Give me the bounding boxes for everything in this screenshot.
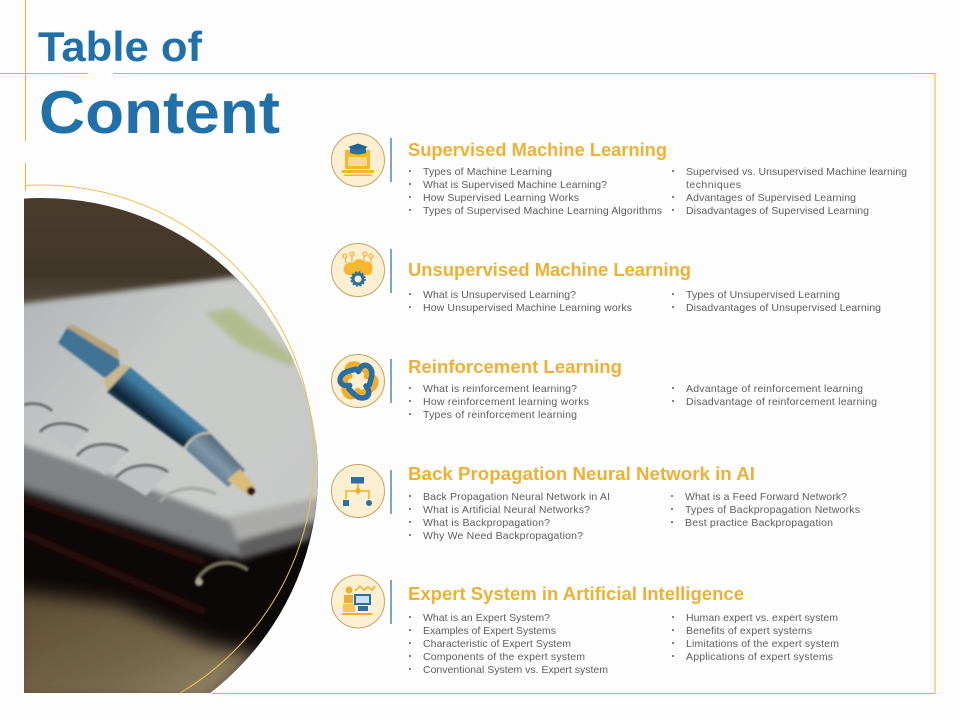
icon: flow hierarchy xyxy=(332,464,384,518)
notebook rings xyxy=(24,404,248,586)
bullet list: right: Advantage of reinforcement learning xyxy=(686,383,863,395)
bullet list: left: What is Supervised Machine Learning? xyxy=(423,179,607,191)
bullet list: right: Best practice Backpropagation xyxy=(685,517,833,529)
bullet list: left xyxy=(409,289,632,314)
bullet list: left: How Supervised Learning Works xyxy=(423,192,579,204)
bullet list: right: Types of Backpropagation Networks xyxy=(685,504,860,516)
bullet list: right: Types of Unsupervised Learning xyxy=(686,289,840,301)
bullet list: left xyxy=(409,491,610,542)
bullet list: right: Limitations of the expert system xyxy=(686,638,839,650)
icon: interlocked loops xyxy=(332,354,384,408)
bullet list: right: Benefits of expert systems xyxy=(686,625,812,637)
section: Reinforcement Learning xyxy=(332,354,877,421)
icon: brain with gear xyxy=(332,244,384,296)
section: Supervised Machine Learning: Supervised Machine Learning xyxy=(408,140,667,160)
bullet list: right xyxy=(672,289,881,314)
bullet list: right: Disadvantages of Supervised Learning xyxy=(686,205,869,217)
bullet list: left: Why We Need Backpropagation? xyxy=(423,530,583,542)
icon: laptop with graduation cap xyxy=(332,134,384,186)
bullet list: left: How reinforcement learning works xyxy=(423,396,589,408)
title: Content xyxy=(39,79,280,146)
thin gold arc around photo xyxy=(26,185,314,693)
bullet list: left: Examples of Expert Systems xyxy=(423,625,556,637)
bullet list: left: What is an Expert System? xyxy=(423,612,550,624)
bullet list: right: Disadvantages of Unsupervised Learning xyxy=(686,302,881,314)
bullet list: left: What is Backpropagation? xyxy=(423,517,550,529)
bullet list: right: Applications of expert systems xyxy=(686,651,833,663)
icon: expert with monitor chart xyxy=(332,575,384,628)
pen xyxy=(58,324,255,495)
bullet list: left: How Unsupervised Machine Learning works xyxy=(423,302,632,314)
bullet list: left: Types of Machine Learning xyxy=(423,166,552,178)
section: Back Propagation Neural Network in AI: Back Propagation Neural Network in AI xyxy=(408,464,755,484)
bullet list: right: Disadvantage of reinforcement learning xyxy=(686,396,877,408)
bullet list: right: Human expert vs. expert system xyxy=(686,612,838,624)
bullet list: left: What is Unsupervised Learning? xyxy=(423,289,576,301)
bullet list: right: Advantages of Supervised Learning xyxy=(686,192,856,204)
bullet list: left xyxy=(409,166,662,217)
bullet list: left xyxy=(409,383,589,421)
section: Supervised Machine Learning xyxy=(332,134,907,217)
section: Expert System in Artificial Intelligence xyxy=(332,575,839,676)
bullet list: right: Supervised vs. Unsupervised Machine learning xyxy=(686,166,907,178)
bullet list: left: What is Artificial Neural Networks? xyxy=(423,504,590,516)
section: Reinforcement Learning: Reinforcement Learning xyxy=(408,357,622,377)
section: Unsupervised Machine Learning xyxy=(332,244,881,314)
bullet list: right xyxy=(671,491,860,529)
title: Table of xyxy=(38,23,203,70)
bullet list: right xyxy=(672,383,877,408)
bullet list: left: Types of reinforcement learning xyxy=(423,409,577,421)
title xyxy=(38,23,280,146)
section: Unsupervised Machine Learning: Unsupervised Machine Learning xyxy=(408,260,691,280)
bullet list: left: Conventional System vs. Expert system xyxy=(423,664,608,676)
bullet list: left: What is reinforcement learning? xyxy=(423,383,577,395)
bullet list: left: Types of Supervised Machine Learning Algorithms xyxy=(423,205,662,217)
bullet list: right: What is a Feed Forward Network? xyxy=(685,491,847,503)
bullet list: right xyxy=(672,166,907,217)
bullet list: left: Components of the expert system xyxy=(423,651,585,663)
bullet list: left: Back Propagation Neural Network in AI xyxy=(423,491,610,503)
photo: pen on ring-bound notebook xyxy=(24,198,318,693)
bullet list: right xyxy=(672,612,839,663)
bullet list: left xyxy=(409,612,608,676)
section: Expert System in Artificial Intelligence: Expert System in Artificial Intelligence xyxy=(408,584,744,604)
section: Back Propagation Neural Network in AI xyxy=(332,464,860,542)
bullet list: right: techniques xyxy=(686,179,741,191)
bullet list: left: Characteristic of Expert System xyxy=(423,638,571,650)
